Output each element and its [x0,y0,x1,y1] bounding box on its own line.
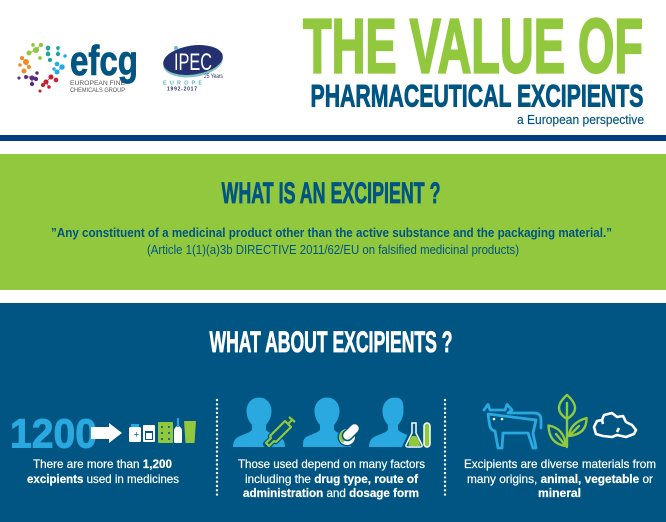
panel: what is an excipient [0,154,666,290]
header divider bar [0,135,666,141]
icon: mineral rock [594,413,636,437]
citation: (Article 1(1)(a)3b DIRECTIVE 2011/62/EU on falsified medicinal products) [147,243,519,257]
divider: left dots [216,400,218,498]
icon: plant [548,395,587,447]
column: factors [233,398,430,500]
text: more than 1,200: There are more than 1,200 [33,457,172,471]
icon: cow [484,404,541,448]
logo: IPEC Europe: EUROPE [163,80,202,86]
text: factors [238,457,425,500]
logo: EFCG [18,37,138,94]
logo: EFCG: EUROPEAN FINE [70,80,126,87]
logo: IPEC Europe: IPEC [174,49,212,76]
heading: what is an excipient: WHAT IS AN EXCIPIENT ? [222,177,440,210]
text: factors: administration and dosage form [243,486,419,500]
text: origins: many origins, animal, vegetable or [467,472,653,486]
number 1200: 1200 [10,410,97,456]
text: origins: Excipients are diverse materials from [464,457,656,471]
divider: right dots [444,400,446,498]
text: factors: including the drug type, route of [245,472,419,486]
text: origins: mineral [538,486,581,500]
icon: medicine containers [129,418,196,443]
title: a European perspective [517,113,644,127]
icon: arrow [91,423,122,443]
panel: what about excipients [0,303,666,522]
logo: IPEC Europe: 1992-2017 [167,86,197,92]
logo: IPEC Europe [161,41,225,92]
text: origins [464,457,656,500]
text: more than 1,200: excipients used in medicines [27,472,179,486]
definition quote: ”Any constituent of a medicinal product other than the active substance and the packaging material.” [51,226,612,240]
icon: person with syringe [233,398,295,447]
column: origins [464,395,656,500]
heading: what about excipients: WHAT ABOUT EXCIPIENTS ? [210,326,452,359]
logo: EFCG: CHEMICALS GROUP [70,87,125,94]
title [303,4,644,127]
text: factors: Those used depend on many factors [238,457,425,471]
icon: person with lab flask and tube [369,398,430,447]
text: more than 1,200 [27,457,179,486]
icon: person with capsule [303,398,362,447]
logo: EFCG: efcg [70,37,138,84]
logo: IPEC Europe: 25 Years [204,74,223,80]
column: 1200 excipients [10,410,196,486]
